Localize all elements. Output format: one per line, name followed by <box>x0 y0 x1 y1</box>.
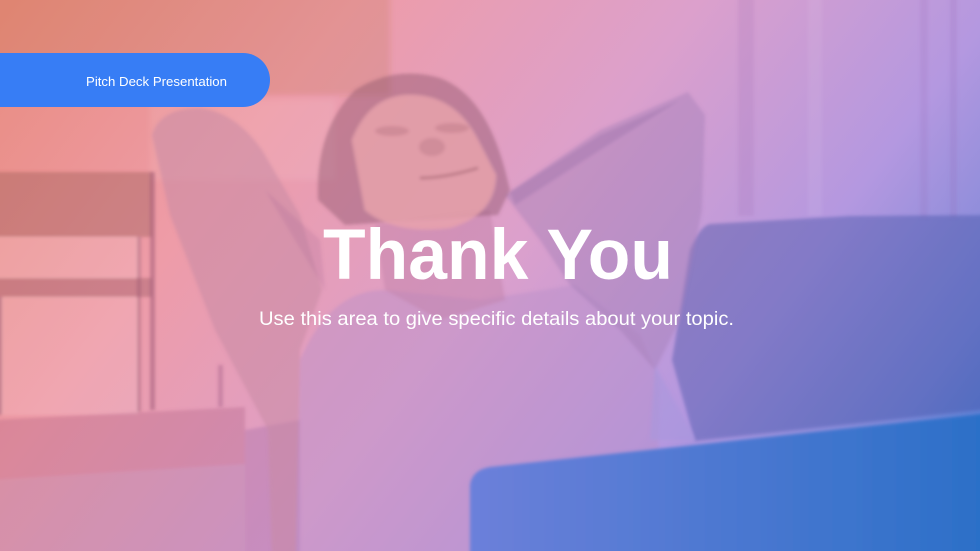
sofa right <box>672 215 980 441</box>
laptop <box>470 412 980 551</box>
subtitle: Use this area to give specific details about your topic. <box>259 308 734 330</box>
title: Thank You <box>323 216 673 295</box>
person sweater <box>152 92 705 551</box>
label pill <box>0 53 270 107</box>
sofa left <box>0 407 300 551</box>
shelf <box>0 172 223 415</box>
pill text: Pitch Deck Presentation <box>86 74 227 89</box>
wooden wall panel <box>0 0 390 180</box>
window frame <box>738 0 957 218</box>
person head <box>318 74 510 320</box>
